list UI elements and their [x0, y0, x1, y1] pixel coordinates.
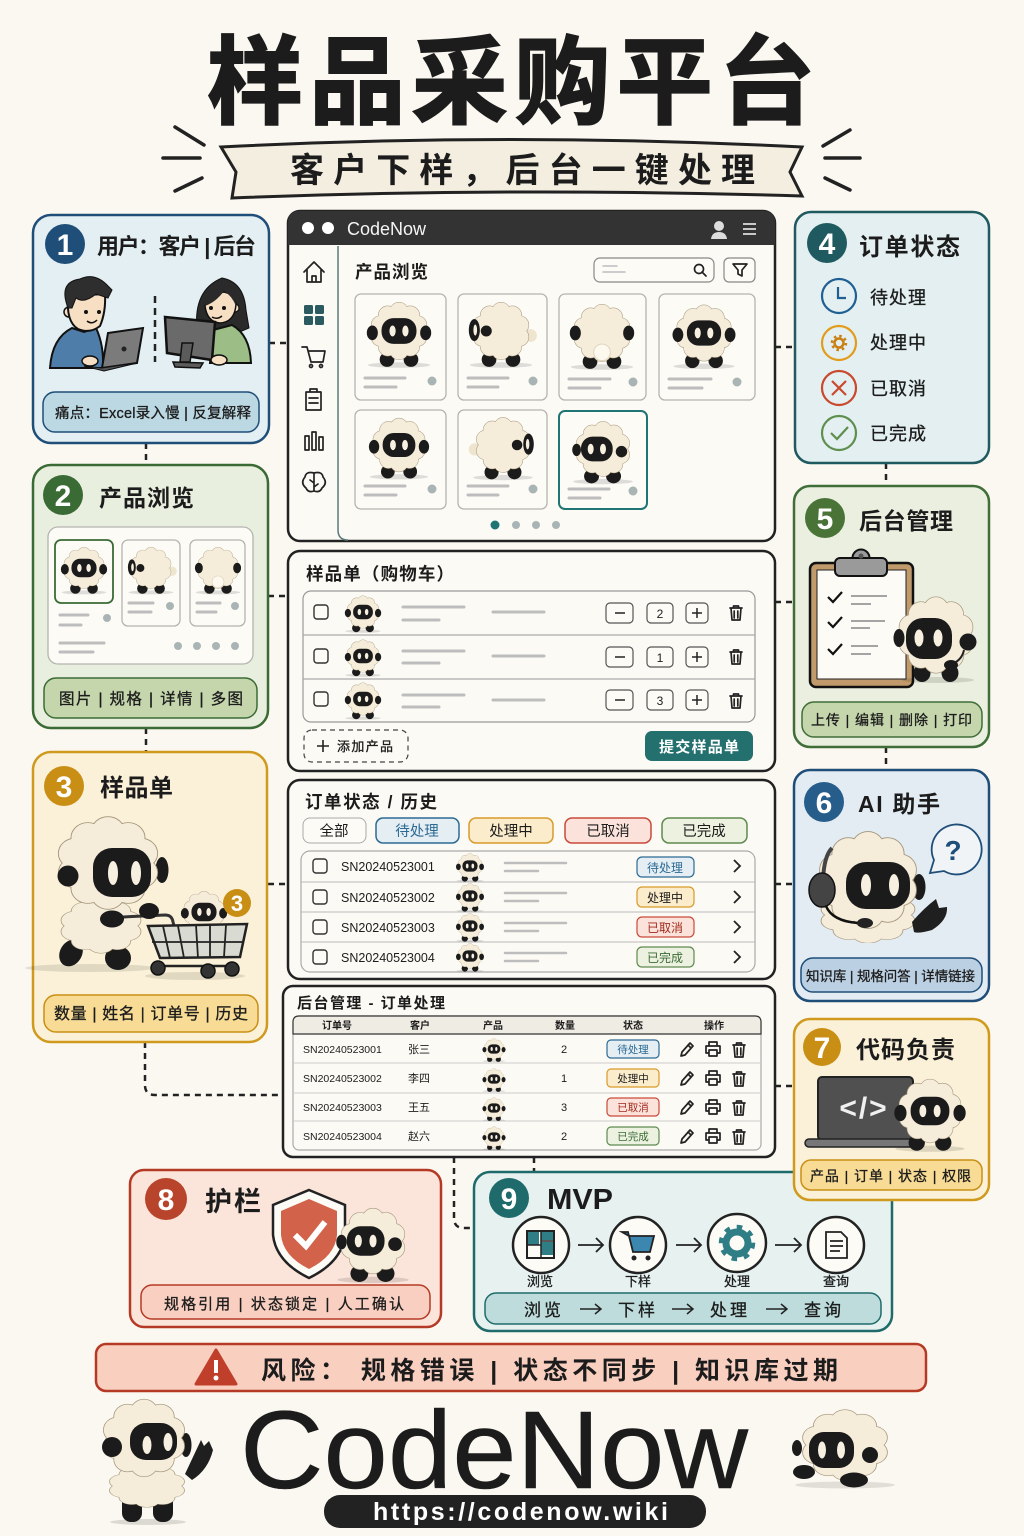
heading: admin: 后台管理 [859, 508, 953, 534]
app name: CodeNow [347, 219, 427, 239]
admin table: 赵六 [408, 1129, 430, 1143]
status: cancelled: 已取消 [870, 379, 926, 399]
burst lines [163, 127, 860, 191]
flow labels: 浏览 [527, 1274, 553, 1289]
order table: 待处理 [647, 861, 683, 875]
submit button: 提交样品单 [659, 738, 739, 756]
panel 9: MVP [474, 1172, 892, 1331]
status: processing [822, 326, 926, 360]
badge 9 [489, 1178, 529, 1218]
product grid [355, 294, 755, 509]
heading: sample list: 样品单 [100, 775, 173, 802]
heading: order status: 订单状态 / 历史 [305, 792, 438, 812]
feature strip [44, 678, 257, 718]
window header [288, 211, 775, 245]
badge 7: 7 [814, 1032, 830, 1065]
illustration: clipboard and sheep [810, 550, 976, 687]
feature strip [44, 995, 258, 1032]
pagination [490, 520, 560, 530]
illustration: laptop and sheep: </> [839, 1092, 889, 1125]
order table: 处理中 [647, 890, 683, 905]
panel 2: product browse [33, 465, 268, 728]
feature strip [802, 702, 982, 737]
icon: warning [196, 1350, 236, 1384]
admin table: 待处理 [617, 1043, 649, 1056]
mascot: resting sheep [792, 1410, 895, 1488]
panel 6: AI assistant [794, 770, 989, 1001]
search box [594, 258, 714, 282]
feature strip: 图片 | 规格 | 详情 | 多图 [59, 690, 243, 708]
pain point strip [43, 392, 259, 432]
logo wordmark: CodeNow [240, 1389, 749, 1512]
divider [154, 296, 156, 362]
badge 3 [44, 766, 84, 806]
admin table: 王五 [408, 1102, 430, 1114]
status tabs: 处理中 [489, 823, 533, 840]
heading: product browse: 产品浏览 [99, 485, 194, 511]
badge 2 [43, 475, 83, 515]
admin table: 3 [561, 1102, 567, 1114]
admin table: 状态 [623, 1019, 643, 1032]
panel: cart [288, 551, 775, 771]
badge 8: 8 [158, 1184, 174, 1217]
speech bubble: ? [944, 835, 962, 866]
heading: product browse: 产品浏览 [355, 262, 428, 282]
status: done [822, 416, 926, 450]
badge 5 [805, 498, 845, 538]
connectors [145, 343, 886, 1228]
panel 8: guardrails [130, 1170, 441, 1327]
admin table: 产品 [483, 1019, 503, 1032]
order table: SN20240523003 [341, 921, 435, 935]
flow labels [527, 1274, 849, 1289]
heading: admin: 后台管理 - 订单处理 [297, 994, 445, 1012]
add product button [304, 730, 408, 762]
illustration: sheep with headset [809, 832, 947, 951]
flow strip: 浏览 [524, 1301, 564, 1320]
admin table: SN20240523003 [303, 1102, 382, 1114]
cart table: 1 [657, 651, 664, 665]
admin table: 1 [561, 1073, 567, 1085]
admin table: SN20240523004 [303, 1131, 382, 1143]
flow labels: 查询 [823, 1274, 849, 1289]
order table: SN20240523002 [341, 891, 435, 905]
heading: guardrails: 护栏 [205, 1187, 261, 1217]
status: done: 已完成 [870, 424, 926, 444]
heading: users: 用户：客户 | 后台 [97, 234, 256, 259]
badge 7 [803, 1028, 841, 1066]
icon: customer with laptop [50, 277, 143, 371]
order table: SN20240523001 [341, 860, 435, 874]
order table: 已取消 [647, 921, 683, 935]
illustration: sheep pushing cart [25, 817, 251, 980]
panel 5: admin [794, 486, 989, 747]
title: 样品采购平台 [207, 30, 815, 137]
status tabs [303, 818, 747, 843]
admin table: SN20240523002 [303, 1073, 382, 1085]
illustration: sheep pushing cart: 3 [231, 891, 243, 916]
badge 1 [45, 224, 85, 264]
url pill: https://codenow.wiki [373, 1498, 668, 1526]
flow strip [485, 1293, 881, 1324]
feature strip: 产品 | 订单 | 状态 | 权限 [810, 1168, 971, 1184]
icon: user and menu [711, 221, 756, 239]
flow strip: 查询 [804, 1301, 844, 1320]
feature strip [141, 1285, 430, 1319]
flow strip: 下样 [618, 1301, 658, 1320]
status: pending: 待处理 [870, 288, 926, 308]
risk banner [96, 1344, 926, 1391]
status tabs: 已完成 [682, 823, 726, 840]
url pill [324, 1495, 706, 1528]
cart table [303, 591, 755, 722]
admin table: 订单号 [322, 1019, 352, 1032]
risk text: 风险： 规格错误 | 状态不同步 | 知识库过期 [261, 1357, 838, 1385]
status: processing: 处理中 [870, 333, 926, 353]
feature strip: 上传 | 编辑 | 删除 | 打印 [811, 712, 972, 728]
badge 4: 4 [819, 228, 836, 261]
icon: shield [273, 1190, 345, 1278]
feature strip: 知识库 | 规格问答 | 详情链接 [806, 968, 975, 984]
heading: MVP: MVP [547, 1184, 613, 1216]
app window: product browsing [288, 211, 775, 541]
flow labels: 处理 [724, 1274, 750, 1289]
panel 3: sample list [25, 752, 267, 1042]
heading: cart: 样品单（购物车） [306, 564, 454, 584]
heading: AI assistant: AI 助手 [858, 791, 940, 817]
admin table [293, 1016, 761, 1150]
admin table: 处理中 [617, 1072, 649, 1085]
admin table: 客户 [410, 1019, 430, 1032]
admin table: 数量 [555, 1019, 575, 1032]
flow strip: 处理 [710, 1301, 750, 1320]
illustration: sheep [336, 1208, 409, 1283]
panel: admin order processing [283, 986, 775, 1157]
mascot: waving sheep [102, 1400, 213, 1525]
speech bubble [930, 824, 982, 874]
heading: code owner: 代码负责 [856, 1037, 955, 1064]
flow icons [513, 1214, 864, 1273]
admin table: 2 [561, 1044, 567, 1056]
admin table: 张三 [408, 1043, 430, 1056]
feature strip: 规格引用 | 状态锁定 | 人工确认 [164, 1296, 404, 1313]
status tabs: 待处理 [395, 823, 439, 840]
add product button: 添加产品 [337, 739, 393, 754]
panel 1: users [33, 215, 269, 443]
feature strip [801, 1160, 982, 1190]
icon: staff at monitor [165, 278, 251, 368]
badge 9: 9 [501, 1183, 517, 1216]
admin table: 李四 [408, 1071, 430, 1085]
badge 5: 5 [817, 503, 833, 536]
admin table: SN20240523001 [303, 1044, 382, 1056]
feature strip [801, 958, 982, 992]
badge 8 [145, 1178, 187, 1220]
status tabs: 全部 [320, 822, 348, 840]
ribbon subtitle [221, 140, 802, 198]
pain point strip: 痛点：Excel录入慢 | 反复解释 [55, 404, 252, 422]
admin table: 操作 [704, 1019, 724, 1032]
sidebar icons [302, 262, 325, 492]
cart table: 3 [657, 694, 664, 708]
admin table: 已完成 [617, 1130, 649, 1143]
badge 6 [804, 782, 844, 822]
feature strip: 数量 | 姓名 | 订单号 | 历史 [54, 1005, 248, 1023]
badge 2: 2 [55, 480, 71, 513]
illustration: laptop and sheep [805, 1077, 966, 1152]
flow labels: 下样 [625, 1274, 651, 1289]
panel 7: code owner [794, 1019, 989, 1200]
admin table: 已取消 [617, 1101, 649, 1114]
order table: SN20240523004 [341, 951, 435, 965]
admin table: 2 [561, 1131, 567, 1143]
status: pending [822, 279, 926, 313]
mini product frame [48, 527, 253, 664]
badge 3: 3 [56, 771, 72, 804]
status: cancelled [822, 371, 926, 405]
badge 6: 6 [816, 787, 832, 820]
panel: order status history [288, 780, 775, 979]
heading: order status: 订单状态 [859, 234, 960, 261]
filter button [724, 258, 755, 282]
panel 4: order status [795, 212, 989, 463]
badge 1: 1 [57, 229, 73, 262]
submit button [645, 731, 753, 761]
status tabs: 已取消 [586, 823, 630, 840]
ribbon subtitle: 客户下样，后台一键处理 [290, 152, 755, 190]
badge 4 [807, 223, 847, 263]
order table [301, 851, 755, 972]
order table: 已完成 [647, 950, 683, 965]
cart table: 2 [657, 607, 664, 621]
